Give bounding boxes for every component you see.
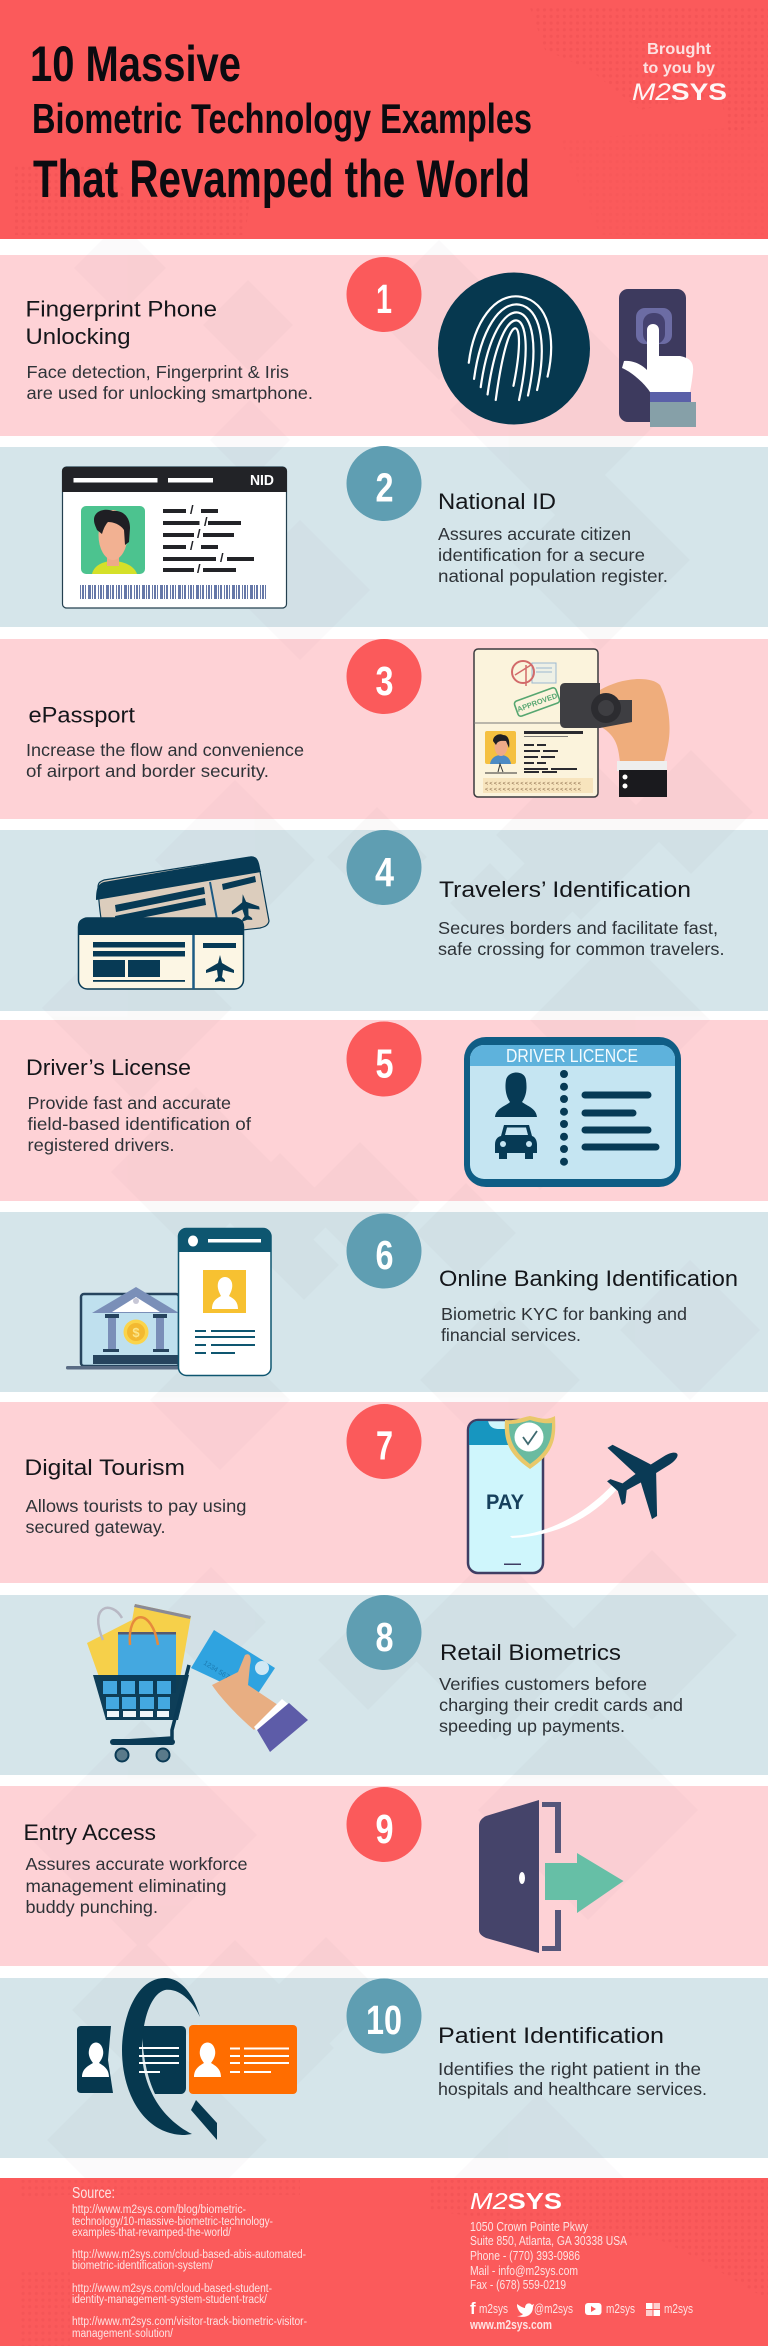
heading: Entry Access xyxy=(24,1820,156,1845)
company contact: Phone - (770) 393-0986 xyxy=(470,2248,580,2263)
description: field-based identification of xyxy=(28,1114,251,1134)
panel: 10 patient identification xyxy=(0,1978,768,2158)
number badge 1 xyxy=(346,257,422,332)
description xyxy=(439,1674,683,1736)
heading: Patient Identification xyxy=(438,2023,664,2048)
panel: 1 fingerprint phone unlocking xyxy=(0,255,768,436)
number badge 8 xyxy=(346,1595,422,1670)
description: financial services. xyxy=(441,1325,581,1345)
description: Provide fast and accurate xyxy=(28,1093,231,1113)
description: Allows tourists to pay using xyxy=(26,1496,246,1516)
icon: laptop bank and phone xyxy=(66,1228,271,1376)
icon: boarding tickets xyxy=(78,857,269,989)
icon: passport and stamp xyxy=(474,649,670,797)
number badge 4 xyxy=(346,830,422,905)
heading: ePassport xyxy=(28,703,136,728)
description: Identifies the right patient in the xyxy=(438,2059,701,2079)
sources: management-solution/ xyxy=(72,2328,174,2340)
icon: shopping cart and credit card: 1234 5678 9012 xyxy=(202,1660,249,1693)
number badge 9: 9 xyxy=(376,1806,394,1852)
description: Face detection, Fingerprint & Iris xyxy=(26,362,289,382)
social links: m2sys xyxy=(606,2301,635,2316)
footer xyxy=(0,2178,768,2346)
panel: 8 retail biometrics xyxy=(0,1595,768,1775)
icon: phone with finger xyxy=(619,289,696,427)
description: speeding up payments. xyxy=(439,1716,625,1736)
number badge 7: 7 xyxy=(376,1422,393,1468)
description: Assures accurate workforce xyxy=(26,1854,247,1874)
sources: http://www.m2sys.com/cloud-based-abis-automated- xyxy=(72,2249,306,2261)
description: registered drivers. xyxy=(28,1135,174,1155)
social links xyxy=(470,2299,693,2318)
heading: National ID xyxy=(438,489,556,514)
description: Increase the flow and convenience xyxy=(26,740,304,760)
description: Biometric KYC for banking and xyxy=(441,1304,687,1324)
panel: 3 ePassport xyxy=(0,639,768,819)
number badge 5 xyxy=(346,1022,422,1096)
description: of airport and border security. xyxy=(26,761,269,781)
description xyxy=(26,740,304,781)
icon: passport and stamp: APPROVED xyxy=(516,691,559,714)
heading: Digital Tourism xyxy=(24,1455,185,1480)
description: Secures borders and facilitate fast, xyxy=(438,918,718,938)
heading: Unlocking xyxy=(26,324,130,349)
panel: 6 online banking identification xyxy=(0,1212,768,1392)
social links: f xyxy=(470,2299,476,2318)
number badge 8: 8 xyxy=(376,1614,394,1660)
sources: biometric-identification-system/ xyxy=(72,2260,214,2272)
number badge 3: 3 xyxy=(376,658,394,704)
description xyxy=(438,2059,707,2099)
description: hospitals and healthcare services. xyxy=(438,2079,707,2099)
description: management eliminating xyxy=(26,1876,226,1896)
company contact: 1050 Crown Pointe Pkwy xyxy=(470,2219,588,2234)
brand credit: Brought xyxy=(647,41,712,58)
title xyxy=(30,36,532,209)
description xyxy=(26,362,313,403)
company contact: Fax - (678) 559-0219 xyxy=(470,2277,566,2292)
heading: Online Banking Identification xyxy=(439,1266,738,1291)
number badge 2 xyxy=(346,446,422,521)
brand credit: to you by xyxy=(643,60,715,77)
number badge 6 xyxy=(346,1214,422,1288)
sources: Source: xyxy=(72,2185,115,2202)
description: Assures accurate citizen xyxy=(438,524,631,544)
sources: http://www.m2sys.com/cloud-based-student- xyxy=(72,2283,272,2295)
number badge 7 xyxy=(346,1404,422,1479)
heading: Driver’s License xyxy=(26,1055,191,1080)
description xyxy=(438,524,668,586)
number badge 6: 6 xyxy=(376,1232,394,1278)
description: identification for a secure xyxy=(438,545,645,565)
brand credit: M2SYS xyxy=(632,79,727,106)
company contact: Mail - info@m2sys.com xyxy=(470,2263,578,2278)
icon: ID cards under magnifier xyxy=(77,1978,297,2140)
social links: @m2sys xyxy=(534,2301,573,2316)
social links: m2sys xyxy=(664,2301,693,2316)
panel: 2 national ID xyxy=(0,446,768,627)
description: Verifies customers before xyxy=(439,1674,647,1694)
heading: Retail Biometrics xyxy=(440,1640,621,1665)
title: That Revamped the World xyxy=(33,150,530,209)
number badge 9 xyxy=(346,1787,422,1862)
company contact: Suite 850, Atlanta, GA 30338 USA xyxy=(470,2233,627,2248)
number badge 10: 10 xyxy=(366,1997,402,2043)
icon: ID card: NID xyxy=(250,472,274,489)
panel: 4 travelers identification xyxy=(0,830,768,1011)
description: charging their credit cards and xyxy=(439,1695,683,1715)
description xyxy=(441,1304,687,1345)
icon: driver licence card: DRIVER LICENCE xyxy=(506,1046,638,1066)
icon: phone pay with shield and plane: PAY xyxy=(486,1491,524,1514)
number badge 2: 2 xyxy=(376,465,394,511)
company logo: M2SYS xyxy=(470,2188,562,2214)
heading: Travelers’ Identification xyxy=(439,877,691,902)
description xyxy=(28,1093,251,1155)
website: www.m2sys.com xyxy=(469,2318,552,2332)
sources: technology/10-massive-biometric-technology- xyxy=(72,2216,273,2228)
icon: passport and stamp: <<<<<<<<<<<<<<<<<<<<<< xyxy=(485,781,581,787)
description xyxy=(438,918,724,959)
sources: http://www.m2sys.com/visitor-track-biometric-visitor- xyxy=(72,2316,307,2328)
icon: driver licence card xyxy=(464,1037,681,1187)
number badge 10 xyxy=(346,1978,422,2054)
title: 10 Massive xyxy=(30,36,241,92)
panel: 9 entry access xyxy=(0,1786,768,1966)
panel: 5 driver's license xyxy=(0,1020,768,1201)
description: buddy punching. xyxy=(26,1897,158,1917)
description xyxy=(26,1496,246,1537)
number badge 4: 4 xyxy=(375,849,394,895)
sources: examples-that-revamped-the-world/ xyxy=(72,2227,232,2239)
sources: identity-management-system-student-track/ xyxy=(72,2294,268,2306)
social links: m2sys xyxy=(479,2301,508,2316)
company contact xyxy=(470,2219,627,2292)
description xyxy=(26,1854,247,1917)
title: Biometric Technology Examples xyxy=(32,95,532,142)
sources xyxy=(72,2185,307,2340)
sources: http://www.m2sys.com/blog/biometric- xyxy=(72,2204,246,2216)
description: secured gateway. xyxy=(26,1517,166,1537)
icon: fingerprint xyxy=(438,272,590,424)
icon: passport and stamp: <<<<<<<<<<<<<<<<<<<<<< xyxy=(485,787,581,793)
number badge 5: 5 xyxy=(376,1040,394,1086)
description: national population register. xyxy=(438,566,668,586)
panel: 7 digital tourism xyxy=(0,1402,768,1583)
brand credit xyxy=(632,41,727,106)
icon: door with exit arrow xyxy=(479,1800,624,1953)
heading xyxy=(26,297,217,349)
description: safe crossing for common travelers. xyxy=(438,939,724,959)
icon: laptop bank and phone: $ xyxy=(132,1325,140,1340)
description: are used for unlocking smartphone. xyxy=(26,383,313,403)
icon: ID card xyxy=(62,467,287,608)
heading: Fingerprint Phone xyxy=(26,297,217,322)
icon: shopping cart and credit card xyxy=(87,1604,308,1762)
header banner xyxy=(0,0,768,239)
number badge 3 xyxy=(346,639,422,714)
number badge 1: 1 xyxy=(376,276,392,322)
icon: phone pay with shield and plane xyxy=(468,1416,699,1573)
